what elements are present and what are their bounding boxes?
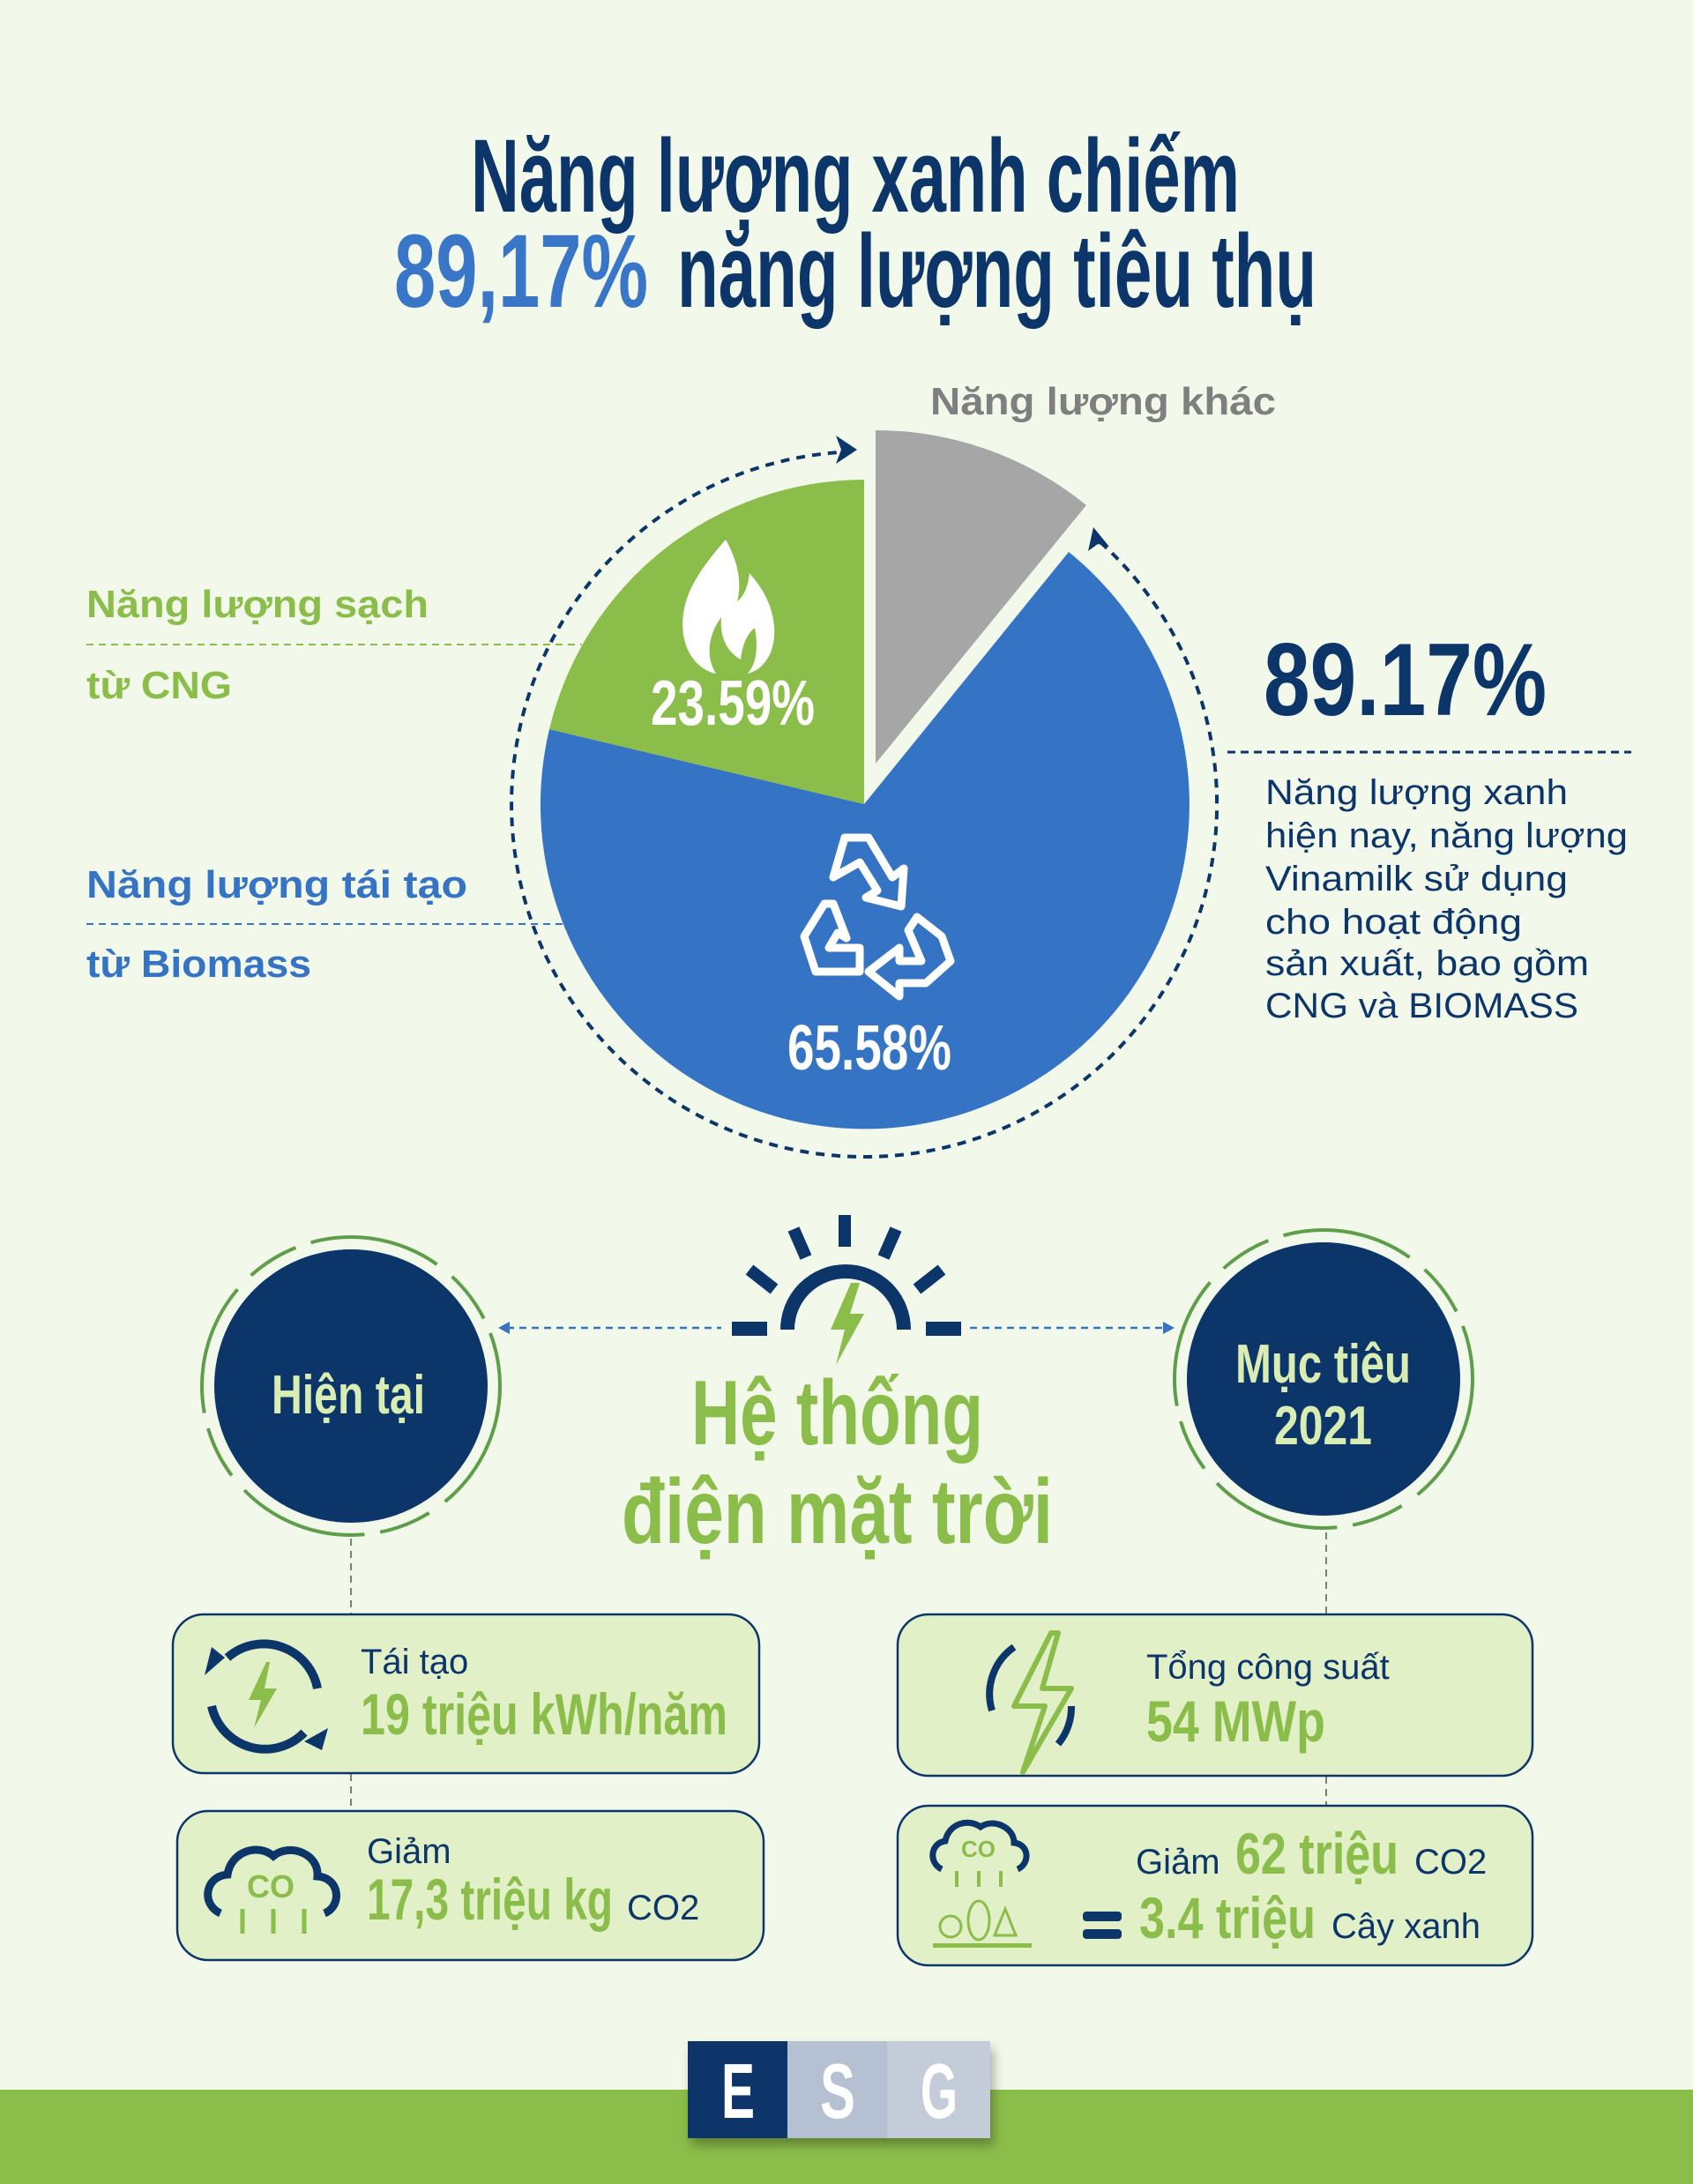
icon: CO2 cloud: CO	[247, 1868, 295, 1904]
footer band	[0, 2090, 1693, 2184]
box: target CO2 and trees: 3.4 triệu	[1139, 1885, 1316, 1950]
icon: cloud and trees	[933, 1822, 1032, 1948]
slice: green CNG	[549, 480, 864, 804]
label: Biomass	[86, 863, 564, 986]
slice: blue biomass	[541, 552, 1190, 1129]
icon: recycle	[804, 838, 951, 996]
title: Năng lượng xanh chiếm	[471, 118, 1240, 235]
label: Biomass: Năng lượng tái tạo	[86, 863, 467, 906]
logo: ESG: S	[820, 2047, 855, 2135]
description text	[1265, 773, 1628, 1025]
circle: current: Hiện tại	[272, 1365, 425, 1426]
logo: ESG: G	[921, 2047, 958, 2135]
stat: 89.17%: 89.17%	[1264, 622, 1547, 737]
icon: cloud and trees: CO	[961, 1836, 996, 1862]
box: CO2 reduction current: 17,3 triệu kg	[367, 1867, 613, 1932]
percent: 23.59: 23.59%	[651, 668, 815, 739]
slice: gray other	[876, 430, 1086, 764]
label: other energy: Năng lượng khác	[930, 380, 1276, 423]
box: target CO2 and trees: 62 triệu	[1235, 1821, 1398, 1886]
box: CO2 reduction current: CO2	[627, 1889, 699, 1927]
box: renewable kWh	[173, 1614, 759, 1773]
circle: target 2021: Mục tiêu	[1235, 1334, 1411, 1395]
circle: target 2021: 2021	[1274, 1396, 1372, 1457]
box: total capacity: 54 MWp	[1146, 1688, 1325, 1754]
box: total capacity: Tổng công suất	[1146, 1648, 1390, 1687]
heading: solar system	[622, 1362, 1053, 1563]
icon: cycle bolt	[205, 1644, 328, 1750]
label: CNG: từ CNG	[86, 664, 232, 707]
box: target CO2 and trees: Giảm	[1136, 1843, 1220, 1882]
box: target CO2 and trees: CO2	[1414, 1843, 1487, 1882]
label: CNG: Năng lượng sạch	[86, 583, 429, 626]
logo: ESG	[688, 2041, 990, 2138]
logo: ESG: E	[721, 2047, 755, 2135]
box: target CO2 and trees: Cây xanh	[1331, 1907, 1480, 1946]
icon: flame	[682, 540, 774, 674]
percent: 65.58: 65.58%	[787, 1013, 951, 1084]
description text: cho hoạt động	[1265, 903, 1522, 942]
heading: solar system: điện mặt trời	[622, 1461, 1053, 1563]
title	[394, 118, 1316, 330]
label: Biomass: từ Biomass	[86, 943, 311, 986]
circle: current	[202, 1237, 500, 1535]
heading: solar system: Hệ thống	[691, 1362, 983, 1465]
dashed ring with arrows	[511, 436, 1217, 1157]
description text: Năng lượng xanh	[1265, 773, 1568, 812]
description text: CNG và BIOMASS	[1265, 987, 1578, 1025]
box: CO2 reduction current: Giảm	[367, 1832, 451, 1871]
box: renewable kWh: 19 triệu kWh/năm	[361, 1681, 727, 1747]
arrows: dashed connectors	[498, 1322, 1175, 1334]
box: target CO2 and trees	[898, 1806, 1533, 1965]
pie chart	[511, 430, 1217, 1157]
box: total capacity	[898, 1614, 1533, 1776]
box: renewable kWh: Tái tạo	[361, 1643, 468, 1681]
box: CO2 reduction current	[177, 1811, 764, 1960]
label: CNG	[86, 583, 582, 707]
description text: sản xuất, bao gồm	[1265, 944, 1589, 983]
title: năng lượng tiêu thụ	[677, 213, 1316, 330]
icon: sun	[732, 1215, 961, 1365]
icon: bolt arcs	[989, 1633, 1071, 1772]
icon: CO2 cloud	[208, 1850, 336, 1934]
circle: target 2021	[1175, 1230, 1473, 1528]
title: 89,17%	[394, 213, 648, 330]
description text: hiện nay, năng lượng	[1265, 816, 1628, 855]
description text: Vinamilk sử dụng	[1265, 860, 1568, 898]
